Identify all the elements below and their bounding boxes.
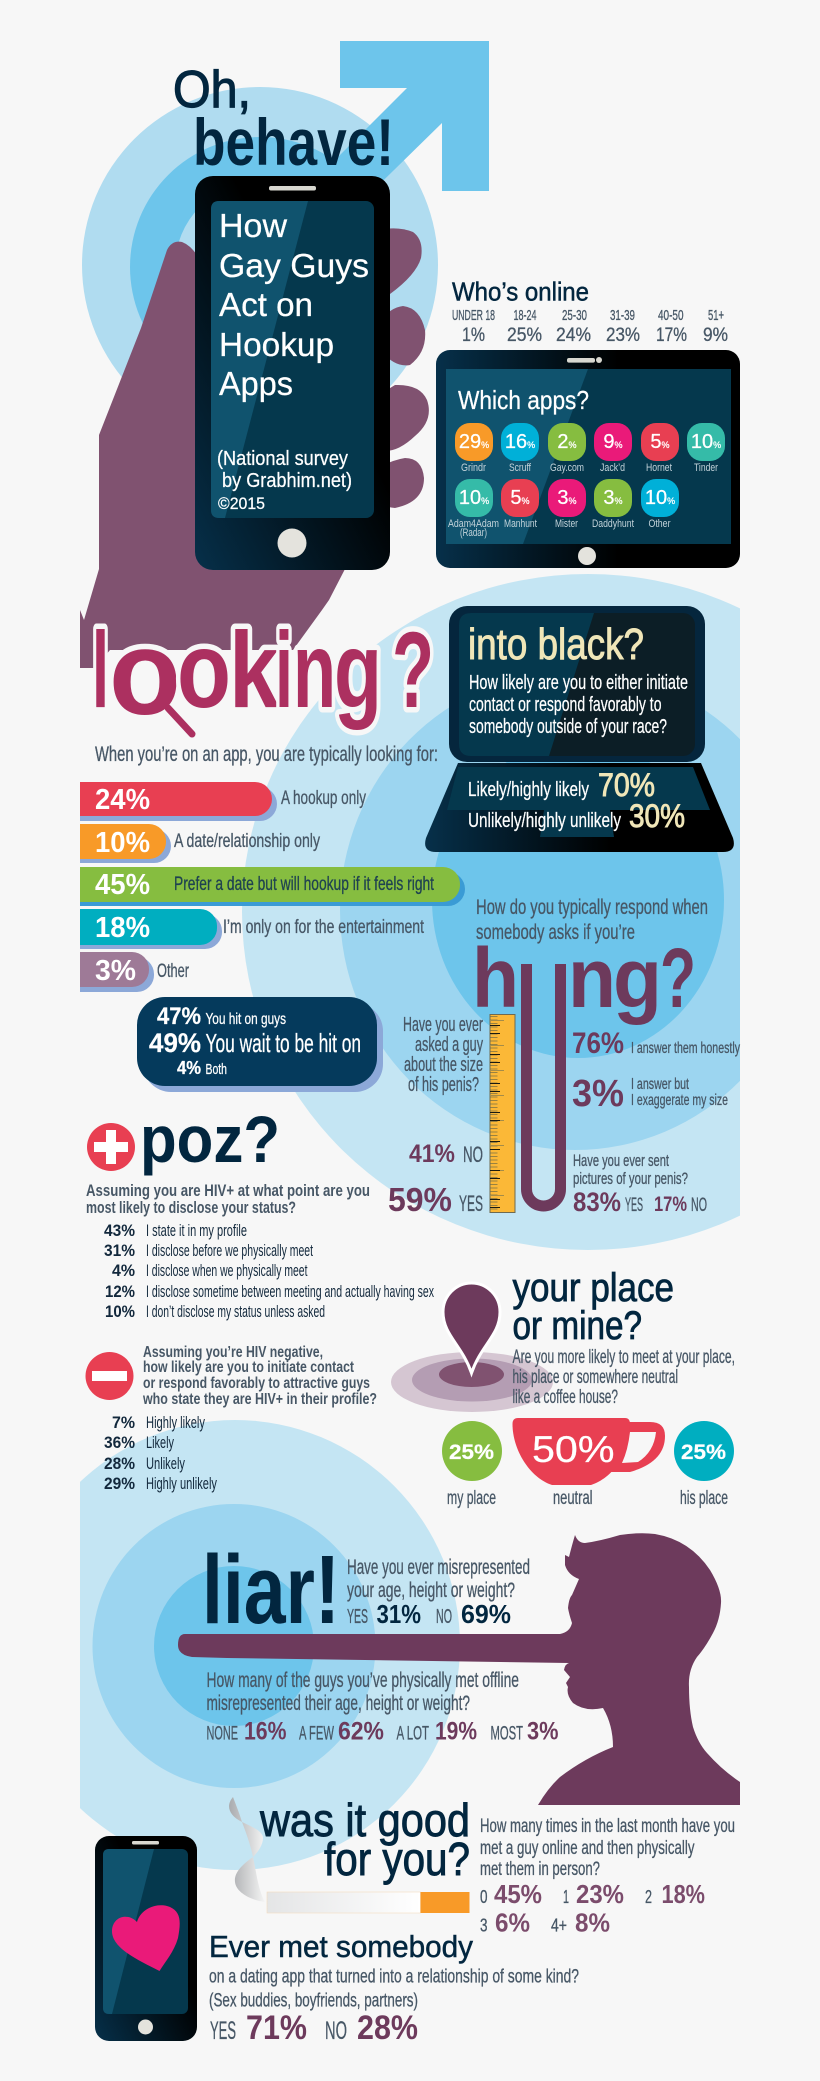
bar percentages: 45%	[95, 869, 150, 901]
text: HIV negative question: how likely are you to initiate contact	[143, 1359, 355, 1376]
stat: his place: 25%	[681, 1441, 726, 1464]
laptop answers	[468, 767, 685, 834]
phone screen text: (National survey	[217, 448, 348, 470]
stat: neutral coffee cup: 50%	[532, 1429, 614, 1470]
stats: how you answer: I exaggerate my size	[631, 1092, 728, 1109]
phone screen text	[217, 207, 369, 513]
list: disclosure stats: 12%	[105, 1282, 135, 1301]
app names: (Radar)	[460, 527, 487, 539]
stats: times met in person: 2	[645, 1887, 652, 1907]
text: ever asked about size: Have you ever	[403, 1014, 483, 1036]
callout: who hits on whom: 47%	[157, 1003, 201, 1030]
list: likelihood stats	[104, 1413, 217, 1493]
age group percentages: 23%	[606, 325, 640, 346]
stat: his place	[674, 1421, 734, 1509]
list: disclosure stats: 31%	[104, 1241, 135, 1260]
list: likelihood stats: 36%	[104, 1433, 135, 1452]
heading: looking?: i	[275, 609, 293, 730]
heading: hung? with U-tube	[472, 931, 696, 1206]
app names: Adam4Adam	[448, 518, 499, 530]
heading: who's online: Who’s online	[452, 276, 589, 306]
text: HIV negative question	[142, 1344, 377, 1408]
main phone	[195, 176, 390, 570]
bar labels: I’m only on for the entertainment	[223, 917, 425, 938]
title: Oh, behave!: behave!	[193, 105, 394, 179]
stats: misrepresented others: 19%	[435, 1718, 477, 1746]
stats: times met in person	[480, 1816, 735, 1938]
bar labels: A date/relationship only	[174, 831, 320, 852]
heading: looking?: n	[293, 609, 336, 730]
male symbol: circles and arrow	[82, 41, 489, 443]
heart	[112, 1905, 180, 1971]
list: likelihood stats: Highly unlikely	[146, 1474, 217, 1493]
phone screen text: Act on	[219, 286, 313, 323]
phone screen text: Apps	[219, 365, 293, 402]
app names: Hornet	[646, 462, 672, 474]
heading: was it good for you?	[259, 1794, 470, 1885]
list: disclosure stats: I disclose before we physically meet	[146, 1241, 313, 1260]
heading: your place or mine?: or mine?	[512, 1304, 642, 1348]
text: HIV positive question: most likely to disclose your status?	[86, 1198, 296, 1217]
stats: times met in person: 8%	[575, 1908, 610, 1938]
stats: how you answer: I answer but	[631, 1076, 689, 1093]
heading: hung? with U-tube: n	[568, 931, 616, 1025]
stats: misrepresented others: How many of the guys you’ve physically met offline	[206, 1669, 519, 1692]
heading: liar!: liar!	[202, 1535, 340, 1644]
stats: misrepresented others: MOST	[490, 1724, 523, 1744]
stat: neutral coffee cup: neutral	[553, 1488, 592, 1509]
stats: misrepresented others	[206, 1669, 558, 1746]
stats: times met in person: 3	[480, 1916, 488, 1936]
stats: misrepresented yourself: 69%	[461, 1599, 511, 1629]
callout: who hits on whom: You wait to be hit on	[206, 1028, 361, 1058]
heading: hung? with U-tube: h	[472, 931, 519, 1025]
stats: times met in person: 6%	[495, 1908, 530, 1938]
stats: asked yes/no	[388, 1140, 483, 1218]
age group labels: 25-30	[562, 307, 587, 324]
stats: sent pictures: 83%	[573, 1187, 621, 1217]
background circles: middle section	[242, 574, 740, 1250]
age group percentages: 17%	[656, 325, 687, 346]
stats: how you answer: 76%	[572, 1027, 624, 1060]
app names	[448, 462, 718, 539]
age group percentages: 25%	[507, 325, 542, 346]
app percentages: 29%	[459, 431, 489, 453]
heading: looking?: g	[334, 609, 382, 730]
phone screen text: How	[219, 207, 287, 244]
list: likelihood stats: 7%	[112, 1413, 135, 1432]
age group percentages: 9%	[703, 325, 728, 346]
bar percentages: 24%	[95, 784, 150, 816]
list: disclosure stats: I don’t disclose my status unless asked	[146, 1302, 325, 1321]
text: ever asked about size: of his penis?	[408, 1074, 479, 1096]
age group percentages	[462, 325, 728, 346]
callout: who hits on whom: You hit on guys	[206, 1011, 286, 1028]
stats: misrepresented others: 3%	[527, 1718, 558, 1746]
stats: asked yes/no: NO	[463, 1142, 483, 1167]
stats: misrepresented yourself: NO	[436, 1606, 452, 1628]
stats: times met in person: 0	[480, 1887, 488, 1907]
list: disclosure stats: 43%	[104, 1221, 135, 1240]
stat: his place: his place	[680, 1488, 728, 1509]
text: place question: like a coffee house?	[512, 1387, 618, 1408]
app percentages: 9%	[603, 431, 623, 453]
icon: cigarette smoke	[229, 1797, 265, 1902]
app names: Other	[648, 518, 671, 530]
list: disclosure stats: 4%	[112, 1261, 135, 1280]
heading: looking?: o	[177, 609, 231, 730]
bar labels	[157, 788, 435, 982]
app names: Tinder	[694, 462, 718, 474]
stats: misrepresented yourself: YES	[347, 1606, 368, 1628]
age group percentages: 24%	[556, 325, 591, 346]
stats: misrepresented yourself: Have you ever misrepresented	[347, 1556, 530, 1579]
age group labels: UNDER 18	[452, 307, 495, 324]
bars	[80, 782, 272, 816]
callout: who hits on whom: Both	[206, 1061, 227, 1078]
stats: ever met somebody: 71%	[246, 2009, 307, 2047]
stat: my place: 25%	[449, 1441, 494, 1464]
app names: Gay.com	[550, 462, 584, 474]
app names: Jack’d	[600, 462, 625, 474]
age group labels: 40-50	[658, 307, 684, 324]
stats: times met in person: 1	[563, 1887, 569, 1907]
phone screen text: Hookup	[219, 326, 334, 363]
stats: sent pictures: Have you ever sent	[573, 1151, 669, 1170]
app percentages: 3%	[603, 487, 623, 509]
app percentages: 10%	[645, 487, 675, 509]
callout: who hits on whom	[137, 997, 383, 1092]
bar labels: Prefer a date but will hookup if it feels right	[174, 874, 435, 895]
app percentages: 10%	[691, 431, 721, 453]
stats: misrepresented others: A FEW	[299, 1724, 334, 1744]
laptop answers: Unlikely/highly unlikely	[468, 810, 621, 832]
stats: how you answer	[572, 1027, 740, 1115]
text: HIV negative question: or respond favorably to attractive guys	[143, 1375, 370, 1392]
icon: small phone with heart	[95, 1836, 197, 2041]
app names: Grindr	[461, 462, 486, 474]
heading: hung? with U-tube: g	[613, 931, 662, 1025]
laptop question: How likely are you to either initiate	[469, 672, 688, 694]
text: looking question: When you’re on an app, you are typically looking for:	[95, 743, 438, 766]
heading: was it good for you?: for you?	[324, 1833, 470, 1885]
laptop question: contact or respond favorably to	[469, 694, 662, 716]
stats: ever met somebody: 28%	[357, 2009, 418, 2047]
text: hung question: How do you typically respond when	[476, 896, 708, 919]
stats: ever met somebody: YES	[210, 2017, 236, 2045]
stats: misrepresented others: misrepresented their age, height or weight?	[206, 1692, 470, 1715]
stats: misrepresented others: 16%	[244, 1718, 286, 1746]
app percentages: 3%	[557, 487, 577, 509]
icon: minus	[86, 1352, 134, 1400]
stats: times met in person: 45%	[494, 1879, 542, 1909]
heading: was it good for you?: was it good	[259, 1794, 470, 1846]
app names: Manhunt	[504, 518, 537, 530]
app percentages: 10%	[459, 487, 489, 509]
stat: my place	[442, 1421, 502, 1509]
stats: sent pictures: YES	[625, 1195, 643, 1216]
background circles: lower section	[80, 1420, 460, 1870]
app percentages: 2%	[557, 431, 577, 453]
text: HIV positive question: Assuming you are HIV+ at what point are you	[86, 1181, 370, 1200]
callout: who hits on whom: 4%	[177, 1058, 201, 1078]
list: disclosure stats: I state it in my profile	[146, 1221, 247, 1240]
bar labels: A hookup only	[281, 788, 366, 809]
heading: looking?: k	[229, 609, 280, 730]
age group percentages: 1%	[462, 325, 485, 346]
list: likelihood stats: 28%	[104, 1454, 135, 1473]
heading: your place or mine?: your place	[512, 1266, 674, 1310]
icon: head silhouette with long nose	[178, 1533, 740, 1805]
age group labels: 31-39	[610, 307, 635, 324]
list: disclosure stats	[104, 1221, 434, 1321]
text: hung question	[476, 896, 708, 944]
phone screen text: Gay Guys	[219, 247, 369, 284]
stats: sent pictures: NO	[691, 1195, 707, 1216]
stats: times met in person: met a guy online and then physically	[480, 1838, 695, 1859]
list: likelihood stats: Likely	[146, 1433, 174, 1452]
age group labels: 51+	[708, 307, 724, 324]
panel: laptop into black: into black?	[468, 620, 644, 669]
list: disclosure stats: I disclose sometime between meeting and actually having sex	[146, 1282, 434, 1301]
app percentages: 5%	[650, 431, 670, 453]
heading: looking?: ?	[392, 609, 434, 730]
stats: sent pictures: pictures of your penis?	[573, 1169, 688, 1188]
stat: my place: my place	[447, 1488, 496, 1509]
app names: Mister	[555, 518, 578, 530]
panel: tablet which apps: Which apps?	[458, 385, 589, 415]
app percentages: 16%	[505, 431, 535, 453]
stats: ever met somebody: NO	[325, 2017, 347, 2045]
laptop answers: Likely/highly likely	[468, 779, 589, 801]
stats: times met in person: 23%	[576, 1879, 624, 1909]
bar percentages	[95, 784, 150, 987]
stats: ever met somebody: Ever met somebody	[209, 1929, 473, 1964]
age group labels: 18-24	[514, 307, 536, 324]
app percentages: 5%	[510, 487, 530, 509]
stats: how you answer: 3%	[572, 1073, 624, 1115]
stats: times met in person: 18%	[662, 1879, 705, 1909]
stats: misrepresented yourself: 31%	[376, 1599, 421, 1629]
laptop question	[469, 672, 688, 738]
heading: looking?: o	[109, 606, 181, 740]
heading: poz?: poz?	[140, 1102, 280, 1176]
list: disclosure stats: I disclose when we physically meet	[146, 1261, 308, 1280]
phone screen text: ©2015	[218, 494, 265, 513]
stats: ever met somebody: (Sex buddies, boyfriends, partners)	[209, 1990, 418, 2012]
heading: looking?: l	[92, 609, 109, 730]
bar percentages: 10%	[95, 827, 150, 859]
app badges	[455, 423, 725, 517]
stats: misrepresented others: 62%	[338, 1718, 384, 1746]
text: place question: his place or somewhere neutral	[512, 1367, 678, 1388]
stats: misrepresented yourself	[347, 1556, 530, 1629]
bar percentages: 3%	[95, 955, 136, 987]
panel: tablet which apps	[436, 350, 740, 568]
phone screen text: by Grabhim.net)	[222, 470, 352, 492]
title: Oh, behave!: Oh,	[173, 61, 251, 119]
stats: how you answer: I answer them honestly	[631, 1040, 740, 1057]
laptop answers: 30%	[629, 798, 685, 834]
bar percentages: 18%	[95, 912, 150, 944]
title: Oh, behave!	[173, 61, 394, 179]
stats: misrepresented others: A LOT	[396, 1724, 429, 1744]
text: hung question: somebody asks if you’re	[476, 921, 635, 944]
laptop answers: 70%	[598, 767, 655, 803]
age group labels	[452, 307, 724, 324]
app names: Scruff	[509, 462, 532, 474]
heading: who's online	[452, 276, 724, 324]
heading: looking?	[92, 606, 434, 740]
bar chart: what you are looking for	[80, 782, 465, 992]
stats: times met in person: 4+	[551, 1916, 567, 1936]
bar shadows	[80, 787, 465, 992]
text: HIV negative question: who state they are HIV+ in their profile?	[142, 1391, 377, 1408]
icon: cigarette	[267, 1892, 470, 1913]
heading: hung? with U-tube: ?	[660, 931, 696, 1025]
stats: asked yes/no: 59%	[388, 1181, 452, 1218]
text: ever asked about size: about the size	[404, 1054, 483, 1076]
icon: plus	[87, 1123, 135, 1171]
stats: misrepresented others: NONE	[206, 1724, 238, 1744]
callout: who hits on whom: 49%	[149, 1028, 201, 1058]
stat: neutral coffee cup	[512, 1418, 665, 1509]
stats: ever met somebody: on a dating app that turned into a relationship of some kind?	[209, 1966, 579, 1988]
stats: sent pictures: 17%	[654, 1193, 687, 1216]
list: likelihood stats: Highly likely	[146, 1413, 205, 1432]
stats: misrepresented yourself: your age, height or weight?	[347, 1579, 515, 1602]
list: disclosure stats: 10%	[105, 1302, 135, 1321]
laptop question: somebody outside of your race?	[469, 716, 667, 738]
app percentages	[459, 431, 721, 509]
stats: times met in person: met them in person?	[480, 1859, 600, 1880]
bar labels: Other	[157, 961, 189, 982]
panel: laptop into black	[425, 606, 734, 852]
stats: ever met somebody	[209, 1929, 579, 2047]
icon: hand holding phone	[80, 228, 429, 668]
list: likelihood stats: Unlikely	[146, 1454, 185, 1473]
stats: asked yes/no: YES	[459, 1191, 483, 1216]
text: ever asked about size: asked a guy	[415, 1034, 483, 1056]
list: likelihood stats: 29%	[104, 1474, 135, 1493]
stats: asked yes/no: 41%	[409, 1140, 455, 1168]
stats: sent pictures	[573, 1151, 707, 1217]
text: place question	[512, 1347, 735, 1408]
app names: Daddyhunt	[592, 518, 634, 530]
heading: your place or mine?	[512, 1266, 674, 1348]
text: ever asked about size	[403, 1014, 483, 1096]
text: HIV negative question: Assuming you’re HIV negative,	[143, 1344, 323, 1361]
text: HIV positive question	[86, 1181, 370, 1217]
icon: ruler	[490, 1014, 515, 1212]
icon: map pin with target	[391, 1283, 553, 1412]
